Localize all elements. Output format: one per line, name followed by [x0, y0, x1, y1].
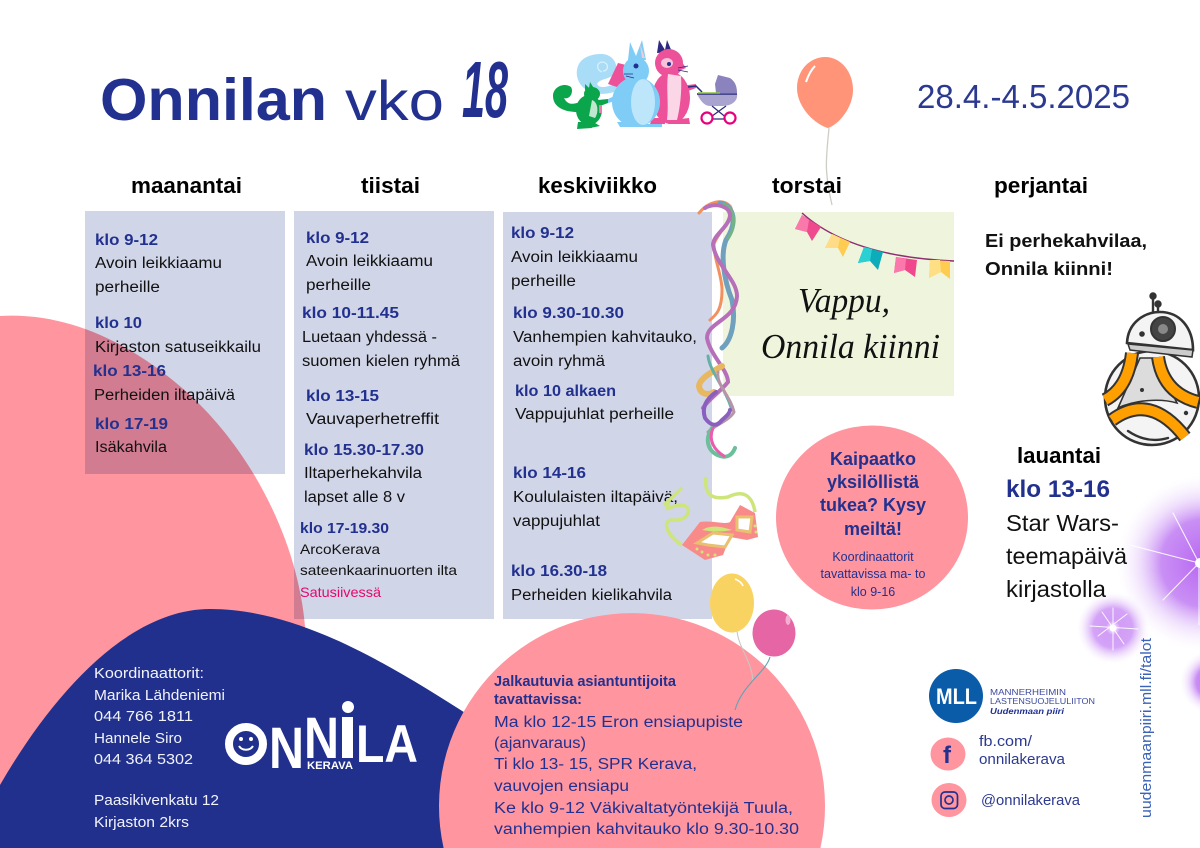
text: visiting experts: (ajanvaraus) — [494, 735, 586, 752]
Tuesday schedule: Vauvaperhetreffit — [306, 411, 440, 428]
text: visiting experts: tavattavissa: — [494, 692, 582, 708]
callout: support circle — [776, 426, 968, 610]
logo: MLL: MLL — [936, 684, 977, 709]
panel: Thursday background — [723, 212, 954, 396]
Monday schedule: klo 13-16 — [93, 363, 166, 380]
logo: Onnila Kerava: N — [304, 706, 339, 771]
text: coordinators contact: Koordinaattorit: — [94, 666, 204, 682]
Tuesday schedule — [300, 230, 460, 600]
text: coordinators contact: Kirjaston 2krs — [94, 815, 189, 831]
callout: support circle: yksilöllistä — [827, 472, 920, 492]
icon: bunting — [795, 213, 954, 279]
callout: support circle: klo 9-16 — [851, 585, 895, 599]
Monday schedule: klo 10 — [95, 315, 142, 332]
weekday headings: torstai — [772, 173, 842, 198]
callout: support circle: meiltä! — [844, 519, 902, 539]
text: Facebook address: onnilakerava — [979, 752, 1066, 768]
handwritten week number: 18 — [462, 45, 508, 134]
weekday headings: tiistai — [361, 173, 420, 198]
callout: support circle: tavattavissa ma- to — [821, 567, 925, 581]
icon: Instagram — [932, 783, 966, 817]
Tuesday schedule: Avoin leikkiaamu — [306, 253, 433, 270]
Monday schedule: Perheiden iltapäivä — [94, 387, 235, 404]
Tuesday schedule: suomen kielen ryhmä — [302, 353, 460, 370]
logo: MLL: Uudenmaan piiri — [990, 707, 1065, 716]
Wednesday schedule: perheille — [511, 273, 576, 290]
Tuesday schedule: klo 10-11.45 — [302, 305, 399, 322]
weekday headings: keskiviikko — [538, 173, 657, 198]
text: visiting experts: vanhempien kahvitauko klo 9.30-10.30 — [494, 821, 799, 838]
text: visiting experts: Ti klo 13- 15, SPR Kerava, — [494, 756, 697, 773]
Monday schedule: Kirjaston satuseikkailu — [95, 339, 261, 356]
Tuesday schedule: Satusiivessä — [300, 584, 381, 600]
text: Thursday Vappu notice — [761, 281, 940, 366]
Tuesday schedule: klo 9-12 — [306, 230, 369, 247]
panel: Monday background — [85, 211, 285, 474]
text: coordinators contact — [94, 666, 225, 831]
Monday schedule: perheille — [95, 279, 160, 296]
weekday headings — [131, 173, 1088, 198]
Wednesday schedule: avoin ryhmä — [513, 353, 605, 370]
text: coordinators contact: 044 766 1811 — [94, 709, 193, 725]
logo: Onnila Kerava: N — [269, 716, 304, 781]
text: Saturday: kirjastolla — [1006, 576, 1106, 602]
text: Friday closed notice: Ei perhekahvilaa, — [985, 231, 1147, 251]
title — [100, 45, 508, 134]
weekday headings: maanantai — [131, 173, 242, 198]
Monday schedule — [93, 232, 261, 456]
Wednesday schedule: Avoin leikkiaamu — [511, 249, 638, 266]
Monday schedule: klo 9-12 — [95, 232, 158, 249]
text: Saturday: teemapäivä — [1006, 543, 1127, 569]
Wednesday schedule — [511, 225, 697, 604]
weekday headings: perjantai — [994, 173, 1088, 198]
icon: yellow and pink balloons — [710, 574, 796, 710]
Wednesday schedule: klo 9-12 — [511, 225, 574, 242]
Monday schedule: Avoin leikkiaamu — [95, 255, 222, 272]
Tuesday schedule: lapset alle 8 v — [304, 489, 405, 506]
text: Thursday Vappu notice: Vappu, — [798, 281, 890, 320]
text: visiting experts — [494, 674, 799, 838]
text: visiting experts: Ke klo 9-12 Väkivaltatyöntekijä Tuula, — [494, 800, 793, 817]
Wednesday schedule: Vappujuhlat perheille — [515, 406, 674, 423]
callout: support circle: tukea? Kysy — [820, 495, 926, 515]
icon: Facebook: f — [943, 742, 952, 769]
logo: Onnila Kerava: LA — [356, 715, 418, 774]
blue squirrel — [628, 40, 646, 60]
Tuesday schedule: klo 15.30-17.30 — [304, 442, 424, 459]
Wednesday schedule: klo 14-16 — [513, 465, 586, 482]
Wednesday schedule: vappujuhlat — [513, 513, 601, 530]
title: Onnilan — [100, 67, 327, 133]
logo: Onnila Kerava — [229, 701, 418, 781]
Monday schedule: klo 17-19 — [95, 416, 168, 433]
Tuesday schedule: klo 17-19.30 — [300, 520, 389, 537]
Monday schedule: Isäkahvila — [95, 439, 167, 456]
icon: Facebook — [930, 738, 966, 770]
Wednesday schedule: Perheiden kielikahvila — [511, 587, 672, 604]
text: visiting experts: Ma klo 12-15 Eron ensiapupiste — [494, 714, 743, 731]
text: visiting experts: Jalkautuvia asiantuntijoita — [494, 674, 677, 690]
green squirrel — [553, 85, 580, 112]
text: coordinators contact: Hannele Siro — [94, 731, 182, 747]
Wednesday schedule: klo 16.30-18 — [511, 563, 607, 580]
logo: Onnila Kerava: KERAVA — [307, 760, 353, 772]
Tuesday schedule: sateenkaarinuorten ilta — [300, 562, 457, 578]
text: Saturday: lauantai — [1017, 443, 1101, 468]
Wednesday schedule: klo 10 alkaen — [515, 383, 616, 400]
text: website vertical: uudenmaanpiiri.mll.fi/talot — [1138, 637, 1155, 818]
Tuesday schedule: ArcoKerava — [300, 541, 380, 557]
panel: Wednesday background — [503, 212, 712, 619]
panel: Tuesday background — [294, 211, 494, 619]
text: Saturday: Star Wars- — [1006, 510, 1119, 536]
text: Saturday: klo 13-16 — [1006, 476, 1110, 503]
text: Friday closed notice — [985, 231, 1147, 279]
text: coordinators contact: 044 364 5302 — [94, 752, 193, 768]
Tuesday schedule: perheille — [306, 277, 371, 294]
background: pink blob — [0, 316, 306, 848]
blue tail — [577, 54, 620, 94]
icon: party streamers — [699, 202, 737, 457]
text: Friday closed notice: Onnila kiinni! — [985, 259, 1113, 279]
text: Facebook address — [979, 734, 1066, 768]
logo: MLL — [929, 669, 1095, 723]
text: Facebook address: fb.com/ — [979, 734, 1033, 750]
pink squirrel — [657, 40, 672, 53]
icon: orange balloon — [797, 57, 853, 205]
pram — [697, 94, 737, 106]
Wednesday schedule: Vanhempien kahvitauko, — [513, 329, 697, 346]
text: coordinators contact: Marika Lähdeniemi — [94, 688, 225, 704]
icon: carnival mask — [664, 477, 758, 560]
text: coordinators contact: Paasikivenkatu 12 — [94, 793, 219, 809]
Wednesday schedule: klo 9.30-10.30 — [513, 305, 624, 322]
Tuesday schedule: Luetaan yhdessä - — [302, 329, 437, 346]
background: purple sparkle glows — [1077, 475, 1200, 714]
logo: MLL: LASTENSUOJELULIITON — [990, 697, 1095, 706]
Wednesday schedule: Koululaisten iltapäivä, — [513, 489, 678, 506]
background: navy blob — [0, 609, 470, 848]
text: Instagram handle: @onnilakerava — [981, 793, 1081, 809]
icon: BB-8 robot — [1105, 294, 1199, 445]
pink hair — [608, 63, 630, 90]
icon: squirrels with pram — [553, 40, 737, 129]
Tuesday schedule: Iltaperhekahvila — [304, 465, 422, 482]
date: 28.4.-4.5.2025 — [917, 78, 1130, 115]
logo: MLL: MANNERHEIMIN — [990, 688, 1066, 697]
text: visiting experts: vauvojen ensiapu — [494, 778, 629, 795]
text: Saturday — [1006, 443, 1127, 602]
title: vko — [345, 69, 444, 132]
callout: support circle: Kaipaatko — [830, 449, 916, 469]
text: Thursday Vappu notice: Onnila kiinni — [761, 327, 940, 366]
Tuesday schedule: klo 13-15 — [306, 388, 379, 405]
background: pink bottom circle — [439, 613, 825, 848]
callout: support circle: Koordinaattorit — [832, 550, 914, 564]
